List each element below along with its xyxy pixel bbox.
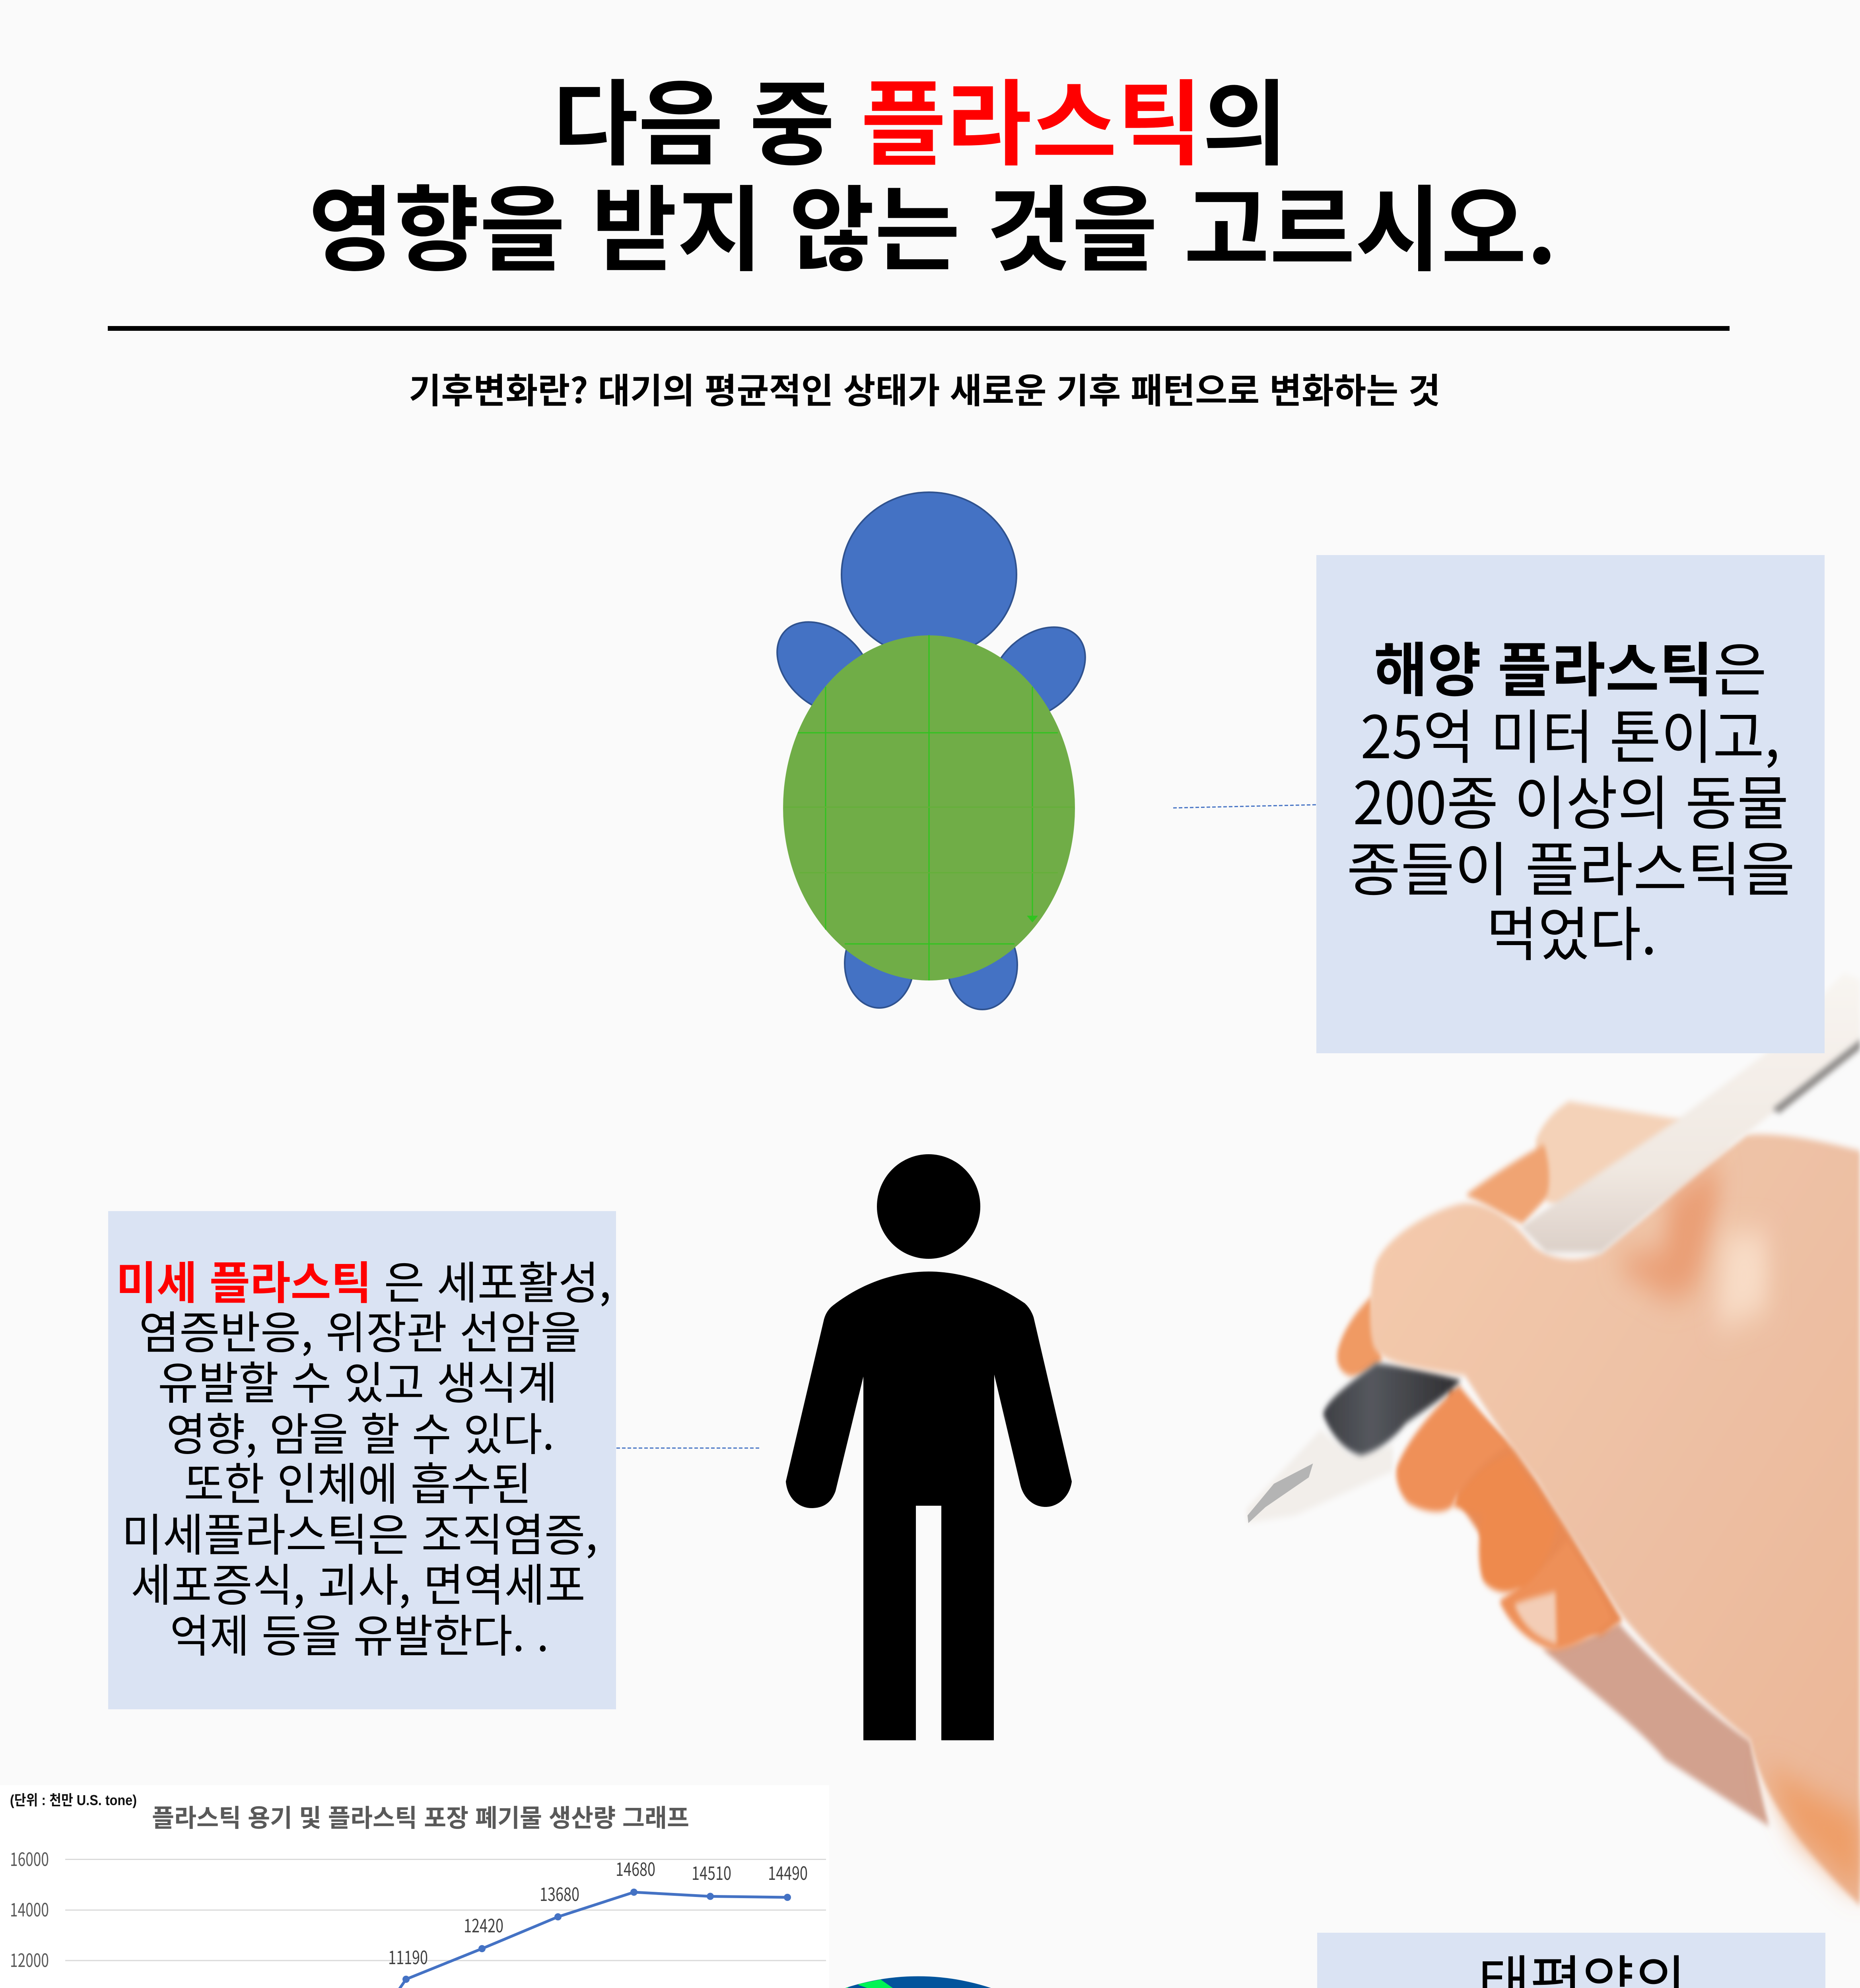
y axis labels: 12000 <box>10 1946 49 1972</box>
panel: microplastic callout: 세포증식, 괴사, 면역세포 <box>131 1549 585 1614</box>
title <box>308 50 1557 290</box>
connector: turtle to ocean plastic box <box>1173 805 1316 808</box>
illustration: writing hand with pen <box>1246 973 1860 1905</box>
data line <box>98 1889 791 1988</box>
panel: microplastic callout: 유발할 수 있고 생식계 <box>158 1347 558 1412</box>
panel: garbage patch callout <box>1317 1933 1825 1988</box>
panel: ocean plastic callout: 해양 플라스틱은 <box>1374 623 1767 708</box>
chart title: 플라스틱 용기 및 플라스틱 포장 폐기물 생산량 그래프 <box>152 1805 689 1832</box>
panel: microplastic callout: 미세 플라스틱 은 세포활성, <box>116 1247 611 1312</box>
panel: microplastic callout: 미세플라스틱은 조직염증, <box>122 1499 598 1564</box>
data labels: 14510 <box>692 1859 731 1885</box>
panel: microplastic callout <box>108 1211 616 1709</box>
y axis labels <box>10 1845 49 1988</box>
panel: ocean plastic callout: 200종 이상의 동물 <box>1353 756 1789 841</box>
panel: microplastic callout: 염증반응, 위장관 선암을 <box>139 1297 581 1362</box>
data labels: 11190 <box>388 1943 428 1970</box>
data labels: 14490 <box>768 1859 808 1885</box>
title: 영향을 받지 않는 것을 고르시오. <box>308 155 1557 290</box>
chart unit note: (단위 : 천만 U.S. tone) <box>10 1792 137 1808</box>
title: 다음 중 플라스틱의 <box>553 50 1288 184</box>
y axis labels: 16000 <box>10 1845 49 1872</box>
chart: plastic container and packaging waste generation <box>0 1785 829 1988</box>
connector: microplastic box to person <box>616 1447 760 1449</box>
title divider rule <box>108 326 1730 331</box>
panel: microplastic callout: 억제 등을 유발한다. . <box>170 1600 549 1665</box>
panel: ocean plastic callout: 종들이 플라스틱을 <box>1347 822 1795 908</box>
panel: microplastic callout: 또한 인체에 흡수된 <box>184 1448 532 1513</box>
panel: ocean plastic callout: 25억 미터 톤이고, <box>1361 690 1780 775</box>
icon: globe <box>845 1976 991 1988</box>
data labels: 14680 <box>616 1855 655 1881</box>
y axis labels: 14000 <box>10 1896 49 1922</box>
data labels <box>92 1855 808 1988</box>
panel: microplastic callout: 영향, 암을 할 수 있다. <box>166 1398 554 1464</box>
subtitle: definition of climate change: 기후변화란? 대기의 평균적인 상태가 새로운 기후 패턴으로 변화하는 것 <box>409 363 1440 414</box>
icon: turtle <box>759 492 1103 1010</box>
panel: ocean plastic callout <box>1316 555 1825 1053</box>
data labels: 12420 <box>464 1912 503 1938</box>
icon: person <box>786 1154 1072 1740</box>
panel: ocean plastic callout: 먹었다. <box>1486 887 1657 973</box>
data labels: 13680 <box>540 1880 579 1906</box>
